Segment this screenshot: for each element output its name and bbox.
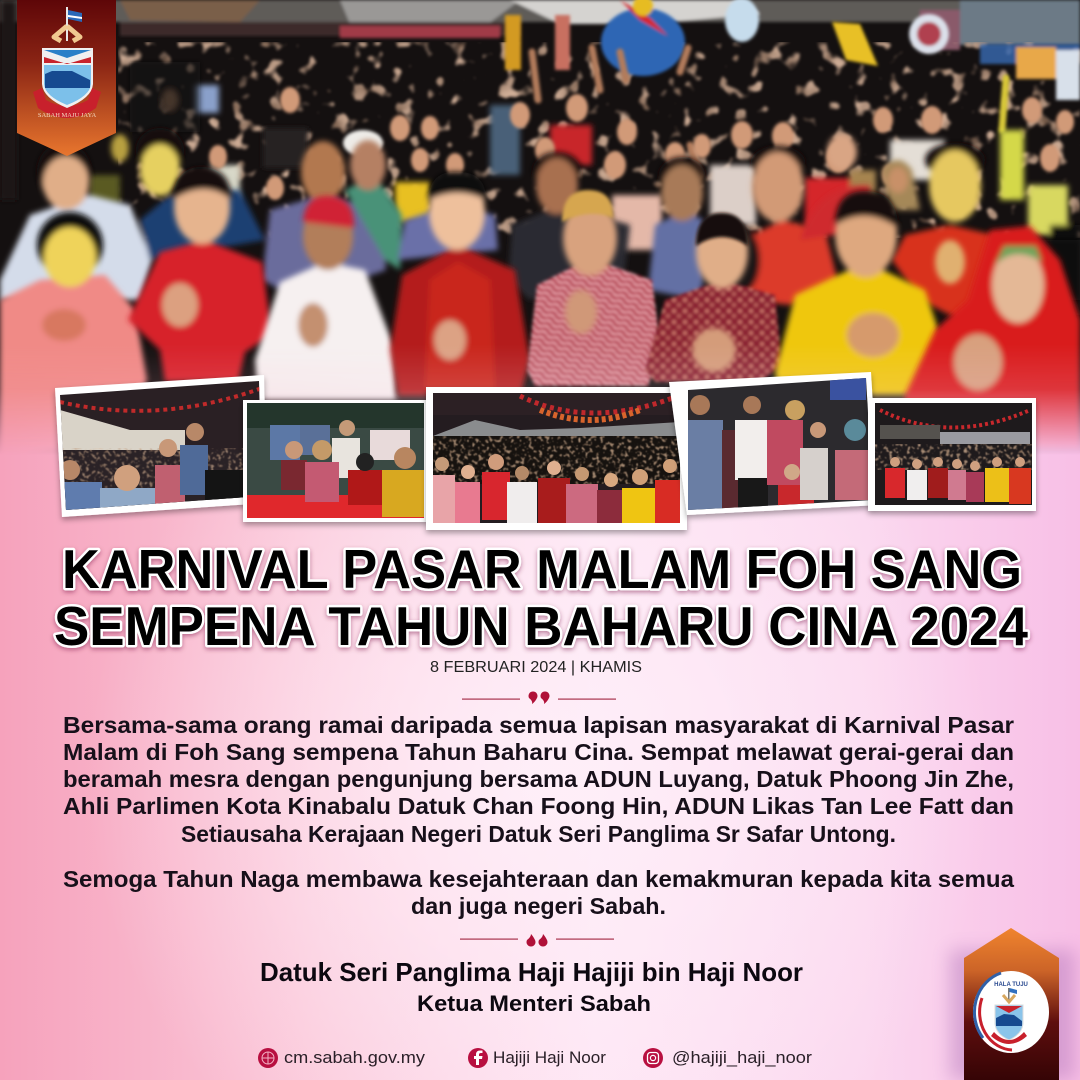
left dark crowd with highlight — [0, 0, 200, 200]
closing wish: Semoga Tahun Naga membawa kesejahteraan dan kemakmuran kepada kita semua — [63, 866, 1014, 892]
back row people — [0, 128, 1080, 320]
person: red shirt man — [128, 167, 272, 382]
footer contacts — [258, 1048, 812, 1068]
thumbnail 5 — [868, 398, 1036, 511]
title — [54, 538, 1028, 657]
bottom quote divider — [460, 934, 614, 947]
icon: motto ribbon — [33, 88, 101, 118]
person: white shirt man with red cap — [255, 196, 396, 400]
thumbnail 2 — [243, 400, 428, 522]
top banner with Sabah coat of arms — [17, 0, 116, 156]
website: cm.sabah.gov.my — [284, 1048, 426, 1067]
message paragraph — [63, 712, 1014, 847]
bottom banner with round logo — [964, 928, 1059, 1080]
icon: round Hala Tuju logo: HALA TUJU — [994, 982, 1028, 988]
icon: crest hands — [54, 26, 80, 41]
thumbnail 3 main — [426, 387, 687, 530]
thumbnail 4 — [669, 372, 880, 515]
person: batik maroon shirt — [645, 213, 782, 382]
icon: instagram — [643, 1048, 663, 1068]
signatory name: Datuk Seri Panglima Haji Hajiji bin Haji Noor — [260, 957, 803, 987]
fair balloons and signs — [505, 0, 1080, 100]
person: red-orange shirt hands — [935, 240, 965, 284]
instagram handle: @hajiji_haji_noor — [672, 1048, 812, 1067]
closing wish: dan juga negeri Sabah. — [411, 893, 666, 919]
message paragraph: Bersama-sama orang ramai daripada semua lapisan masyarakat di Karnival Pasar — [63, 712, 1014, 738]
icon: website globe — [258, 1048, 278, 1068]
date: 8 FEBRUARI 2024 | KHAMIS — [430, 659, 642, 676]
hero photo: crowd and dignitaries — [0, 0, 1080, 460]
mid crowd with clothes — [88, 80, 1080, 255]
facebook name: Hajiji Haji Noor — [493, 1048, 606, 1067]
signatory title: Ketua Menteri Sabah — [417, 991, 651, 1016]
closing wish — [63, 866, 1014, 919]
tents and fair decorations — [0, 0, 1080, 50]
photo collage — [55, 372, 1036, 530]
message paragraph: beramah mesra dengan pengunjung bersama ADUN Luyang, Datuk Phoong Jin Zhe, — [63, 766, 1014, 792]
person: red hijab woman — [900, 226, 1080, 450]
icon: shield — [42, 48, 93, 108]
near crowd faces — [209, 87, 1074, 200]
title: KARNIVAL PASAR MALAM FOH SANG — [62, 538, 1022, 600]
top quote divider — [462, 691, 616, 704]
person: batik pink shirt with tan cap — [527, 190, 661, 386]
raised arms — [532, 48, 1006, 175]
person: yellow shirt man — [775, 191, 945, 395]
person: red silk man — [390, 172, 530, 396]
message paragraph: Ahli Parlimen Kota Kinabalu Datuk Chan Foong Hin, ADUN Likas Tan Lee Fatt dan — [63, 793, 1014, 819]
icon: flag — [66, 7, 82, 41]
icon: facebook — [468, 1048, 488, 1068]
title: SEMPENA TAHUN BAHARU CINA 2024 — [54, 595, 1028, 657]
message paragraph: Malam di Foh Sang sempena Tahun Baharu Cina. Sempat melawat gerai-gerai dan — [63, 739, 1014, 765]
thumbnail 1 — [55, 375, 270, 520]
message paragraph: Setiausaha Kerajaan Negeri Datuk Seri Panglima Sr Safar Untong. — [181, 821, 896, 847]
dense crowd texture — [118, 42, 1080, 238]
bottom banner shadow — [950, 950, 1075, 1080]
person: pink shirt woman — [0, 212, 147, 460]
icon: round Hala Tuju logo — [973, 971, 1049, 1053]
front row people — [0, 167, 1080, 460]
motto text: SABAH MAJU JAYA — [38, 112, 96, 119]
